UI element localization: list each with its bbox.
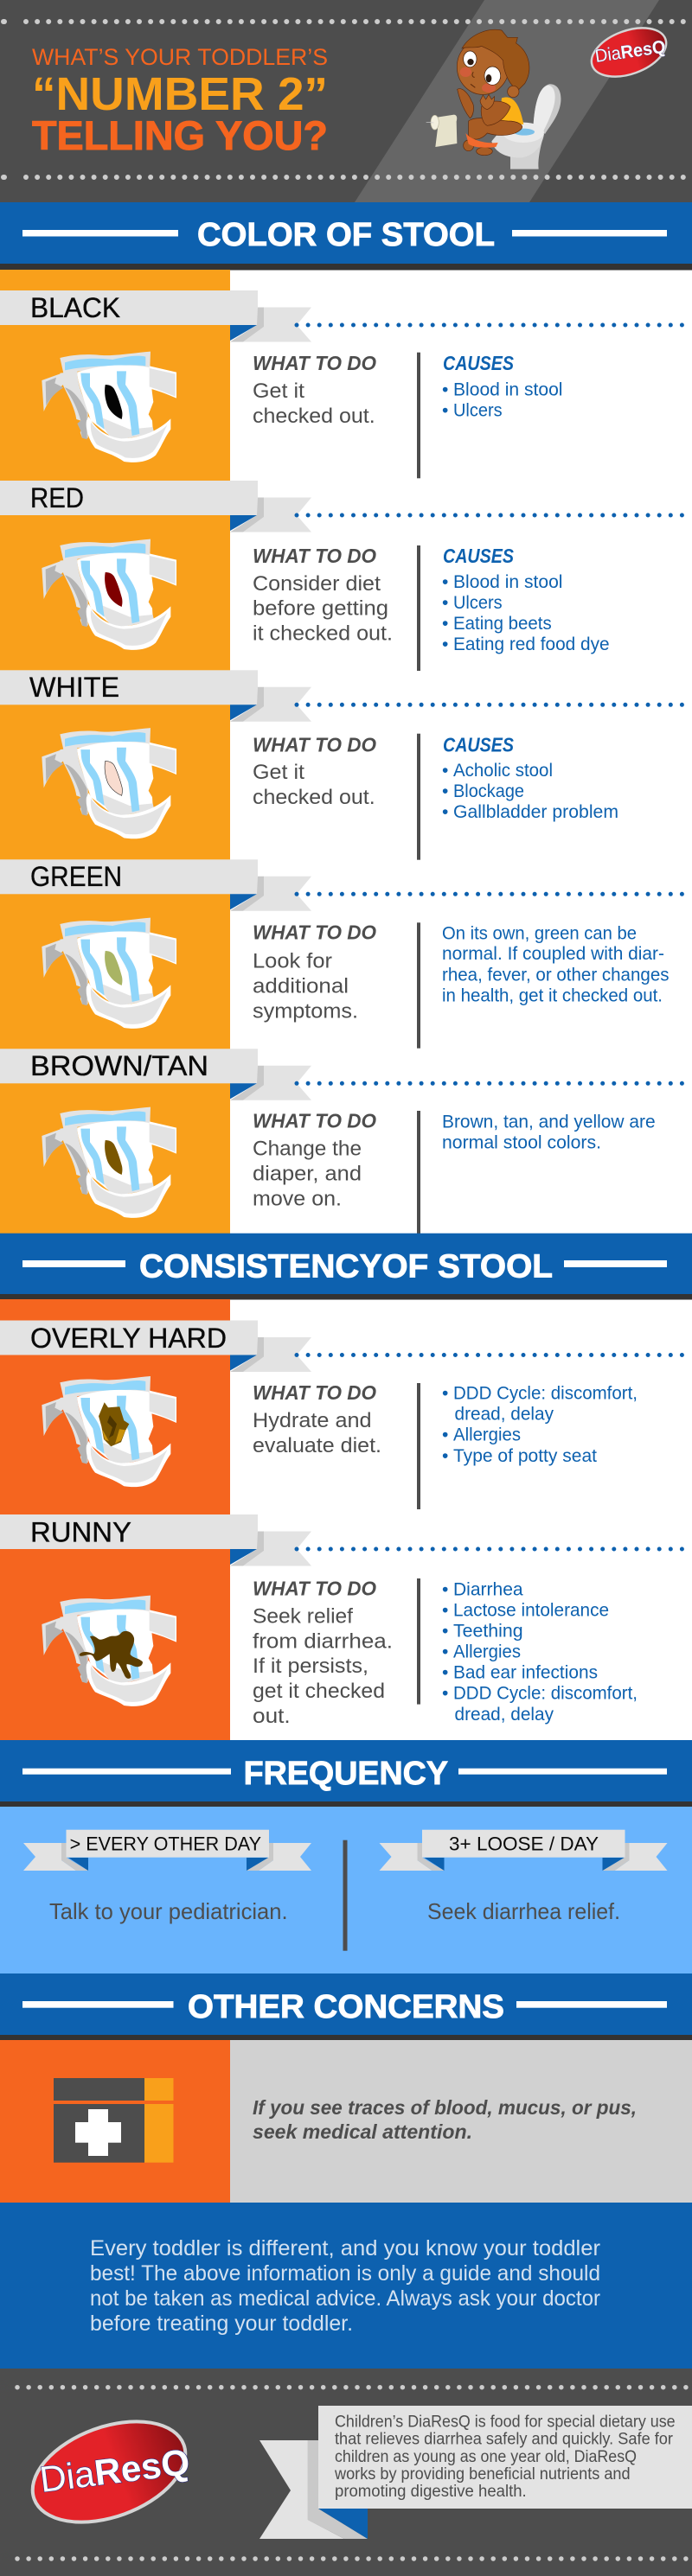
section heading: frequency	[0, 1740, 692, 1807]
what to do: red: WHAT TO DO	[253, 545, 376, 567]
what to do: white	[253, 733, 376, 809]
note: green: in health, get it checked out.	[442, 985, 663, 1005]
what to do: runny: If it persists,	[253, 1655, 368, 1678]
ribbon: about DiaResQ: works by providing beneficial nutrients and	[334, 2465, 631, 2484]
causes: black: •	[442, 400, 448, 420]
ribbon: about DiaResQ: children as young as one year old, DiaResQ	[335, 2448, 637, 2466]
ribbon: red: RED	[30, 482, 84, 513]
panel: frequency	[0, 1807, 692, 1973]
causes: runny: dread, delay	[455, 1705, 554, 1725]
logo: DiaResQ large: DiaResQ	[37, 2441, 192, 2500]
causes: red: •	[442, 634, 448, 654]
text: seek medical attention: seek medical attention.	[253, 2120, 472, 2143]
causes: red: Ulcers	[453, 593, 503, 613]
panel: orange color column	[0, 270, 230, 1234]
panel: disclaimer: not be taken as medical advice. Always ask your doctor	[90, 2286, 600, 2311]
ribbon: black	[0, 290, 692, 342]
causes: overly hard: •	[442, 1383, 448, 1404]
causes: runny: •	[442, 1684, 448, 1704]
text: seek medical attention: If you see traces of blood, mucus, or pus,	[253, 2096, 637, 2119]
what to do: black	[253, 352, 376, 428]
panel: disclaimer: Every toddler is different, and you know your toddler	[90, 2236, 600, 2260]
panel: disclaimer	[0, 2203, 692, 2369]
row: brown/tan	[0, 1049, 692, 1234]
note: green	[442, 924, 670, 1005]
causes: red: •	[442, 614, 448, 634]
icon: diaper with green stool	[42, 918, 176, 1029]
what to do: runny: out.	[253, 1705, 291, 1728]
ribbon: brown/tan	[0, 1049, 692, 1100]
text: seek diarrhea relief: Seek diarrhea relief.	[427, 1898, 620, 1924]
icon: medicine bottle	[54, 2078, 173, 2163]
causes: overly hard: dread, delay	[455, 1405, 554, 1425]
what to do: overly hard: evaluate diet.	[253, 1434, 381, 1457]
header panel	[0, 0, 692, 202]
what to do: runny	[253, 1577, 393, 1728]
causes: runny: •	[442, 1663, 448, 1683]
causes: black: •	[442, 379, 448, 399]
what to do: green: Look for	[253, 949, 332, 972]
what to do: black: checked out.	[253, 405, 375, 428]
note: brown	[442, 1112, 656, 1152]
ribbon: green	[0, 859, 692, 911]
causes: runny: Bad ear infections	[453, 1663, 598, 1683]
what to do: green: WHAT TO DO	[253, 921, 376, 944]
ribbon: black: BLACK	[30, 292, 120, 323]
causes: red: Eating beets	[453, 614, 552, 634]
icon: diaper with brown stool	[42, 1107, 176, 1218]
ribbon: every other day: > EVERY OTHER DAY	[70, 1833, 261, 1855]
what to do: black: Get it	[253, 379, 304, 403]
ribbon: brown/tan: BROWN/TAN	[30, 1050, 208, 1081]
logo: DiaResQ large	[19, 2402, 199, 2541]
text: talk to your pediatrician: Talk to your pediatrician.	[49, 1898, 288, 1924]
ribbon: 3+ loose per day	[379, 1830, 668, 1871]
causes: runny: Diarrhea	[453, 1580, 523, 1599]
ribbon: about DiaResQ	[260, 2406, 692, 2539]
panel: orange consistency column	[0, 1299, 230, 1740]
causes: black: Blood in stool	[453, 379, 562, 399]
title: TELLING YOU?	[32, 112, 328, 158]
causes: white	[442, 733, 618, 822]
causes: white: Blockage	[453, 781, 524, 801]
icon: diaper with hard stool	[42, 1376, 176, 1487]
causes: white: •	[442, 761, 448, 781]
causes: red: •	[442, 572, 448, 592]
causes: white: •	[442, 802, 448, 822]
causes: overly hard: Type of potty seat	[453, 1446, 597, 1466]
row: white	[0, 670, 692, 860]
logo: DiaResQ small	[585, 19, 673, 86]
icon: diaper with white stool	[42, 728, 176, 838]
text: seek medical attention	[253, 2096, 637, 2143]
ribbon: about DiaResQ: that relieves diarrhea safely and quickly. Safe for	[335, 2431, 674, 2449]
causes: runny: Lactose intolerance	[453, 1601, 609, 1621]
note: green: normal. If coupled with diar-	[442, 944, 664, 964]
panel: disclaimer: before treating your toddler.	[90, 2311, 353, 2336]
title: WHAT’S YOUR TODDLER’S	[32, 44, 328, 70]
ribbon: overly hard	[0, 1321, 692, 1372]
row: green	[0, 859, 692, 1049]
ribbon: runny	[0, 1514, 692, 1566]
what to do: red: it checked out.	[253, 622, 393, 646]
note: green: On its own, green can be	[442, 924, 637, 944]
causes: white: •	[442, 781, 448, 801]
section heading: consistency of stool: CONSISTENCYOF STOOL	[139, 1249, 553, 1285]
row: overly hard	[0, 1321, 692, 1509]
ribbon: red	[0, 481, 692, 532]
causes: overly hard: •	[442, 1446, 448, 1466]
causes: overly hard: •	[442, 1425, 448, 1445]
section heading: color of stool	[0, 202, 692, 270]
icon: diaper with runny stool	[42, 1596, 176, 1706]
ribbon: white: WHITE	[29, 672, 119, 703]
causes: runny: •	[442, 1622, 448, 1642]
icon: diaper with black stool	[42, 352, 176, 462]
row: runny	[0, 1514, 692, 1728]
causes: red	[442, 545, 610, 654]
what to do: green	[253, 921, 376, 1023]
causes: black: CAUSES	[443, 352, 514, 374]
causes: black	[442, 352, 562, 420]
panel: disclaimer: best! The above information is only a guide and should	[90, 2261, 600, 2286]
what to do: white: checked out.	[253, 786, 375, 809]
section heading: color of stool: COLOR OF STOOL	[197, 217, 495, 253]
ribbon: about DiaResQ: promoting digestive health.	[335, 2483, 527, 2501]
note: brown: normal stool colors.	[442, 1132, 601, 1152]
what to do: red: Consider diet	[253, 572, 381, 596]
ribbon: green: GREEN	[30, 861, 122, 892]
ribbon: 3+ loose per day: 3+ LOOSE / DAY	[449, 1833, 599, 1855]
ribbon: white	[0, 670, 692, 722]
what to do: runny: from diarrhea.	[253, 1629, 393, 1653]
what to do: green: additional	[253, 974, 349, 998]
what to do: white: Get it	[253, 761, 304, 784]
icon: diaper with red stool	[42, 539, 176, 650]
causes: red: •	[442, 593, 448, 613]
what to do: brown: move on.	[253, 1188, 342, 1211]
causes: runny: •	[442, 1580, 448, 1599]
causes: red: Eating red food dye	[453, 634, 610, 654]
what to do: runny: WHAT TO DO	[253, 1577, 376, 1599]
what to do: white: WHAT TO DO	[253, 733, 376, 756]
what to do: overly hard	[253, 1381, 381, 1457]
what to do: overly hard: Hydrate and	[253, 1409, 372, 1432]
causes: overly hard: Allergies	[453, 1425, 521, 1445]
what to do: brown	[253, 1109, 376, 1211]
what to do: red: before getting	[253, 597, 388, 621]
section heading: other concerns: OTHER CONCERNS	[188, 1989, 504, 2025]
what to do: runny: get it checked	[253, 1680, 385, 1703]
causes: overly hard	[442, 1383, 638, 1466]
causes: runny: DDD Cycle: discomfort,	[453, 1684, 638, 1704]
causes: white: CAUSES	[443, 733, 514, 756]
section heading: consistency of stool	[0, 1234, 692, 1300]
illustration: toddler on toilet	[426, 29, 561, 169]
causes: runny: Teething	[453, 1622, 523, 1642]
panel: other concerns	[0, 2040, 692, 2203]
ribbon: every other day	[23, 1830, 311, 1871]
causes: black: Ulcers	[453, 400, 503, 420]
causes: runny	[442, 1580, 638, 1725]
ribbon: overly hard: OVERLY HARD	[30, 1323, 227, 1354]
causes: runny: Allergies	[453, 1642, 521, 1661]
what to do: runny: Seek relief	[253, 1604, 353, 1629]
logo: DiaResQ small: DiaResQ	[593, 37, 667, 67]
title: “NUMBER 2”	[32, 68, 328, 120]
what to do: brown: diaper, and	[253, 1163, 362, 1186]
title	[32, 44, 328, 158]
what to do: black: WHAT TO DO	[253, 352, 376, 374]
ribbon: runny: RUNNY	[30, 1516, 131, 1547]
note: green: rhea, fever, or other changes	[442, 965, 670, 985]
causes: white: Acholic stool	[453, 761, 553, 781]
ribbon: about DiaResQ: Children’s DiaResQ is food for special dietary use	[335, 2413, 676, 2432]
note: brown: Brown, tan, and yellow are	[442, 1112, 656, 1132]
causes: white: Gallbladder problem	[453, 802, 618, 822]
causes: red: Blood in stool	[453, 572, 562, 592]
what to do: brown: Change the	[253, 1138, 362, 1161]
causes: runny: •	[442, 1601, 448, 1621]
section heading: frequency: FREQUENCY	[244, 1756, 448, 1792]
what to do: brown: WHAT TO DO	[253, 1109, 376, 1132]
row: red	[0, 481, 692, 671]
row: black	[0, 290, 692, 478]
section heading: other concerns	[0, 1973, 692, 2040]
what to do: red	[253, 545, 393, 646]
what to do: overly hard: WHAT TO DO	[253, 1381, 376, 1404]
causes: runny: •	[442, 1642, 448, 1661]
causes: red: CAUSES	[443, 545, 514, 567]
what to do: green: symptoms.	[253, 999, 358, 1023]
footer panel	[0, 2369, 692, 2576]
causes: overly hard: DDD Cycle: discomfort,	[453, 1383, 638, 1404]
